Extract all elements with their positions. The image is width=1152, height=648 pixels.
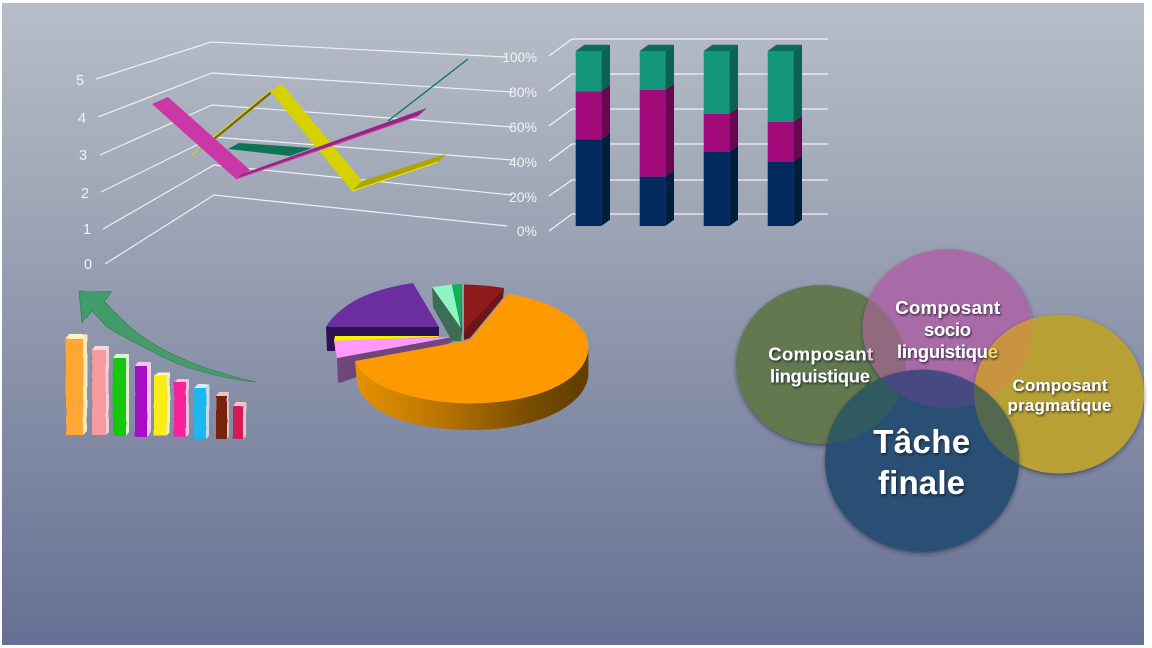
slice: orange (355, 294, 588, 430)
bar 2 (640, 45, 674, 226)
bar chart axis labels: 60% (509, 119, 537, 135)
label: composant pragmatique (1008, 376, 1112, 415)
bar: green (113, 354, 129, 436)
slice: purple (326, 283, 439, 351)
line chart axis labels: 3 (79, 148, 87, 164)
label: tache finale: finale (878, 464, 965, 501)
bar 3 (704, 45, 738, 226)
circle: composant socio linguistique (863, 249, 1033, 408)
label: composant socio linguistique (895, 297, 1000, 362)
bar chart axis labels: 100% (502, 50, 537, 65)
series: green ribbon (228, 59, 468, 156)
bar chart axis labels (502, 50, 537, 239)
label: composant socio linguistique: socio (924, 319, 971, 340)
bar: yellow (154, 372, 170, 436)
line chart axis labels: 1 (83, 222, 91, 238)
slice: dark red (464, 284, 504, 340)
circle: composant pragmatique (974, 314, 1144, 474)
label: composant linguistique (768, 344, 873, 386)
line chart axis labels (76, 73, 92, 273)
venn diagram (736, 249, 1144, 552)
overlap: tache and pragmatique (974, 384, 1019, 464)
3D stacked bar chart (502, 39, 828, 239)
line chart gridlines (96, 42, 512, 264)
circle: tache finale (825, 370, 1019, 552)
slice: mint (432, 284, 461, 341)
label: tache finale (873, 423, 970, 501)
3D exploded pie chart (326, 283, 588, 430)
series: magenta ribbon (152, 97, 427, 179)
overlap: tache and linguistique (826, 371, 905, 444)
bar chart axis labels: 40% (509, 154, 537, 170)
overlap: tache and socio (881, 370, 989, 408)
bar: brown (216, 392, 229, 439)
bar chart gridlines (549, 39, 828, 231)
bar: pink (92, 346, 109, 435)
label: composant socio linguistique: linguistique (897, 341, 998, 362)
line chart axis labels: 5 (76, 73, 84, 89)
label: composant pragmatique: pragmatique (1008, 396, 1112, 415)
line chart axis labels: 0 (84, 257, 92, 273)
overlap: linguistique and socio (863, 299, 906, 378)
line chart axis labels: 4 (78, 111, 86, 127)
bar chart axis labels: 80% (509, 84, 537, 100)
slice: pink (334, 337, 452, 383)
bar: purple (135, 362, 151, 437)
label: composant socio linguistique: Composant (895, 297, 1000, 318)
overlap: socio and pragmatique (974, 318, 1032, 397)
bar: orange (66, 334, 87, 435)
label: composant linguistique: linguistique (770, 366, 870, 386)
bar chart axis labels: 20% (509, 189, 537, 205)
bar 4 (768, 45, 802, 226)
label: composant linguistique: Composant (768, 344, 873, 364)
3D line chart (76, 42, 512, 273)
slice: green (452, 284, 462, 340)
label: composant pragmatique: Composant (1012, 376, 1108, 395)
series: yellow ribbon (192, 84, 446, 191)
bar: magenta pink (174, 379, 189, 437)
slice: yellow (334, 336, 439, 341)
bar: blue (194, 384, 209, 439)
bar 1 (576, 45, 610, 226)
bar chart axis labels: 0% (517, 223, 537, 239)
icon: hand-drawn rising bars with arrow (66, 291, 256, 439)
circle: composant linguistique (736, 285, 906, 444)
label: tache finale: Tâche (873, 423, 970, 460)
icon: green curved arrow (79, 291, 256, 382)
bar: crimson (233, 402, 246, 439)
line chart axis labels: 2 (81, 186, 89, 202)
